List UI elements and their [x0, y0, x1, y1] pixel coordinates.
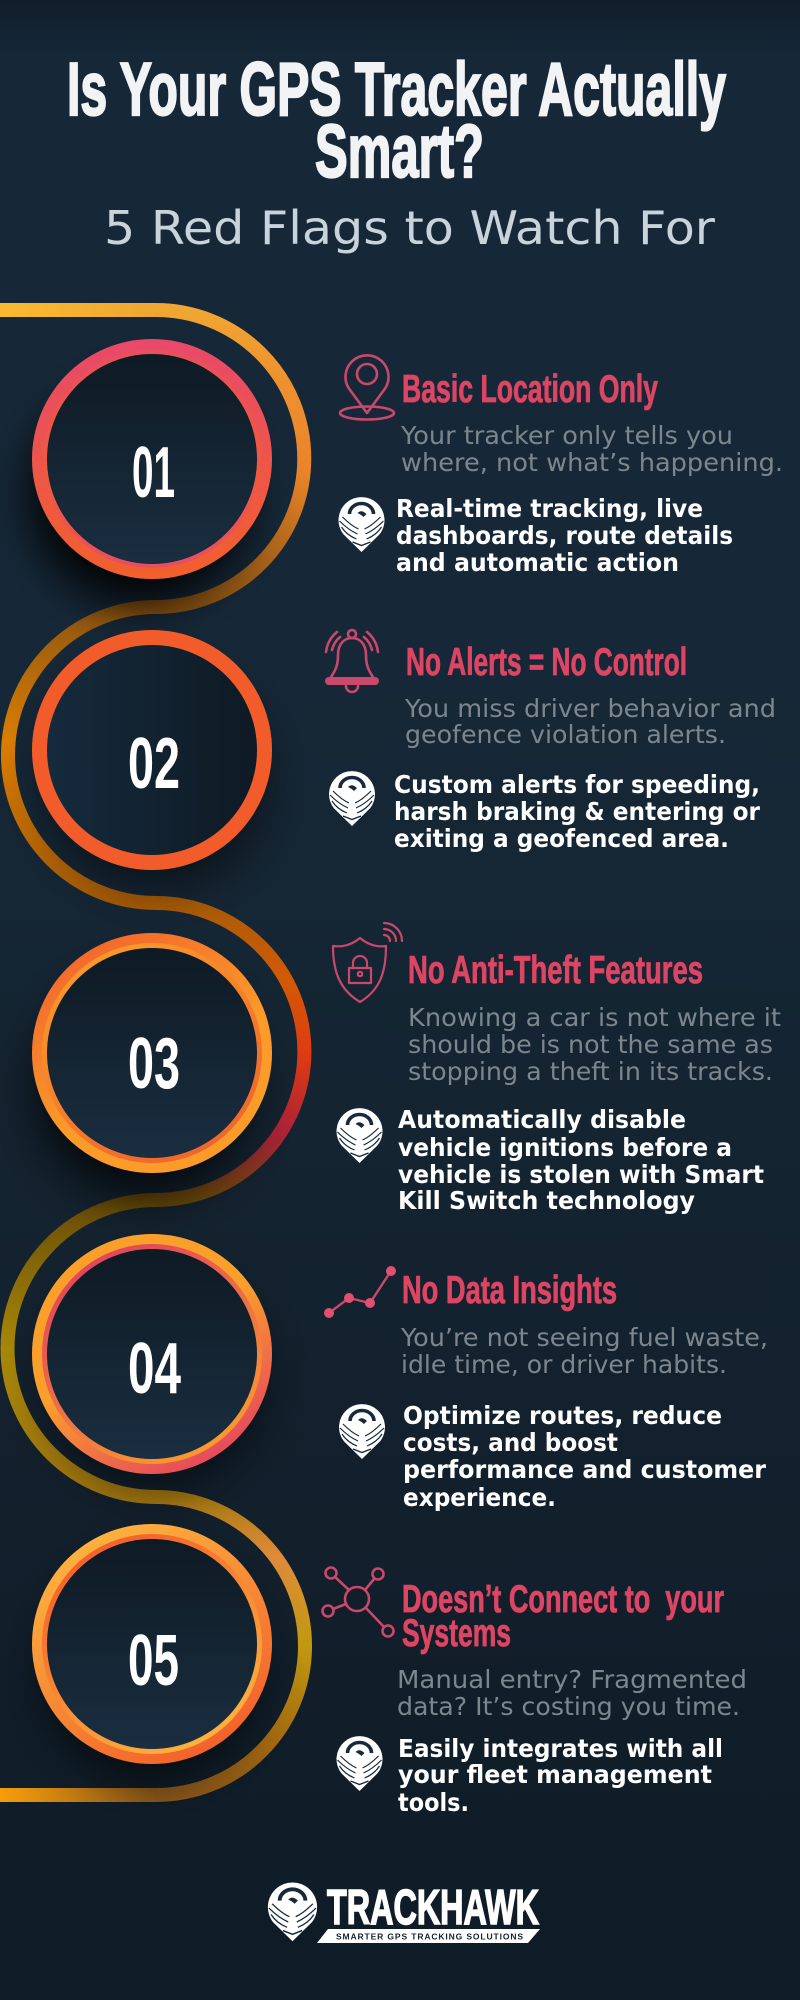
icon: shield with lock and signal	[333, 923, 402, 1002]
circle 05	[32, 1524, 272, 1764]
problem text: data? It’s costing you time.	[397, 1692, 740, 1721]
icon: hawk pin	[336, 1736, 382, 1791]
panel: no data insights	[324, 1266, 768, 1512]
circle shadows	[30, 384, 266, 1782]
problem text: Your tracker only tells you	[400, 421, 733, 450]
problem text: should be is not the same as	[408, 1030, 773, 1059]
problem text: Knowing a car is not where it	[408, 1003, 781, 1032]
problem text: idle time, or driver habits.	[401, 1350, 727, 1379]
subtitle: 5 Red Flags to Watch For	[104, 201, 715, 255]
problem text: You’re not seeing fuel waste,	[400, 1323, 768, 1352]
title	[67, 47, 726, 193]
problem text	[404, 694, 776, 749]
solution text	[394, 770, 761, 853]
panel: no anti-theft	[333, 923, 781, 1215]
icon: hawk pin	[338, 497, 384, 552]
heading: basic location only: Basic Location Only	[402, 368, 658, 411]
panel: no alerts	[326, 630, 776, 853]
heading: no data insights: No Data Insights	[402, 1269, 617, 1312]
connecting ribbon path	[0, 310, 305, 1795]
footer logo	[268, 1881, 540, 1943]
title: Smart?	[315, 109, 484, 193]
solution text: harsh braking & entering or	[394, 797, 761, 826]
problem text: stopping a theft in its tracks.	[408, 1057, 773, 1086]
circle 02: 02	[128, 724, 180, 804]
icon: hawk pin	[336, 1108, 382, 1163]
solution text: vehicle ignitions before a	[398, 1133, 732, 1162]
solution text: your fleet management	[398, 1760, 712, 1789]
icon: map pin	[340, 355, 394, 420]
solution text: Optimize routes, reduce	[403, 1401, 722, 1430]
icon: hawk pin	[339, 1404, 385, 1459]
problem text: where, not what’s happening.	[401, 448, 783, 477]
panel: doesn't connect	[322, 1568, 747, 1817]
problem text	[408, 1003, 781, 1086]
solution text	[398, 1105, 764, 1215]
icon: line chart	[324, 1266, 396, 1318]
solution text: exiting a geofenced area.	[394, 824, 729, 853]
wordmark: TRACKHAWK	[327, 1881, 539, 1935]
solution text: costs, and boost	[403, 1428, 618, 1457]
problem text: Manual entry? Fragmented	[397, 1665, 747, 1694]
problem text	[400, 1323, 768, 1379]
solution text	[396, 494, 733, 577]
icon: network hub	[322, 1568, 394, 1636]
icon: hawk pin	[268, 1882, 317, 1941]
solution text: vehicle is stolen with Smart	[398, 1160, 764, 1189]
solution text	[398, 1734, 723, 1817]
heading: doesn't connect	[402, 1578, 724, 1655]
circle 03: 03	[128, 1024, 180, 1104]
problem text: You miss driver behavior and	[404, 694, 776, 723]
solution text: Automatically disable	[398, 1105, 686, 1134]
tagline banner	[317, 1929, 540, 1943]
solution text: performance and customer	[403, 1455, 767, 1484]
solution text: experience.	[403, 1483, 556, 1512]
problem text	[400, 421, 783, 477]
solution text: and automatic action	[396, 548, 679, 577]
solution text: Kill Switch technology	[398, 1186, 695, 1215]
circle 04: 04	[128, 1329, 181, 1409]
solution text: dashboards, route details	[396, 521, 733, 550]
solution text: Easily integrates with all	[398, 1734, 723, 1763]
circle 01: 01	[132, 433, 175, 513]
circle 05: 05	[128, 1621, 179, 1701]
circle 01	[32, 339, 272, 579]
solution text	[403, 1401, 767, 1512]
icon: bell	[326, 630, 378, 692]
problem text	[397, 1665, 747, 1721]
circle 02	[32, 630, 272, 870]
icon: hawk pin	[329, 771, 375, 826]
tagline banner: SMARTER GPS TRACKING SOLUTIONS	[336, 1932, 523, 1942]
circle 03	[32, 933, 272, 1173]
panel: basic location only	[338, 355, 783, 577]
solution text: Real-time tracking, live	[396, 494, 703, 523]
problem text: geofence violation alerts.	[405, 720, 726, 749]
heading: doesn't connect: Systems	[402, 1612, 511, 1655]
solution text: tools.	[398, 1788, 469, 1817]
solution text: Custom alerts for speeding,	[394, 770, 760, 799]
circle 04	[32, 1234, 272, 1474]
